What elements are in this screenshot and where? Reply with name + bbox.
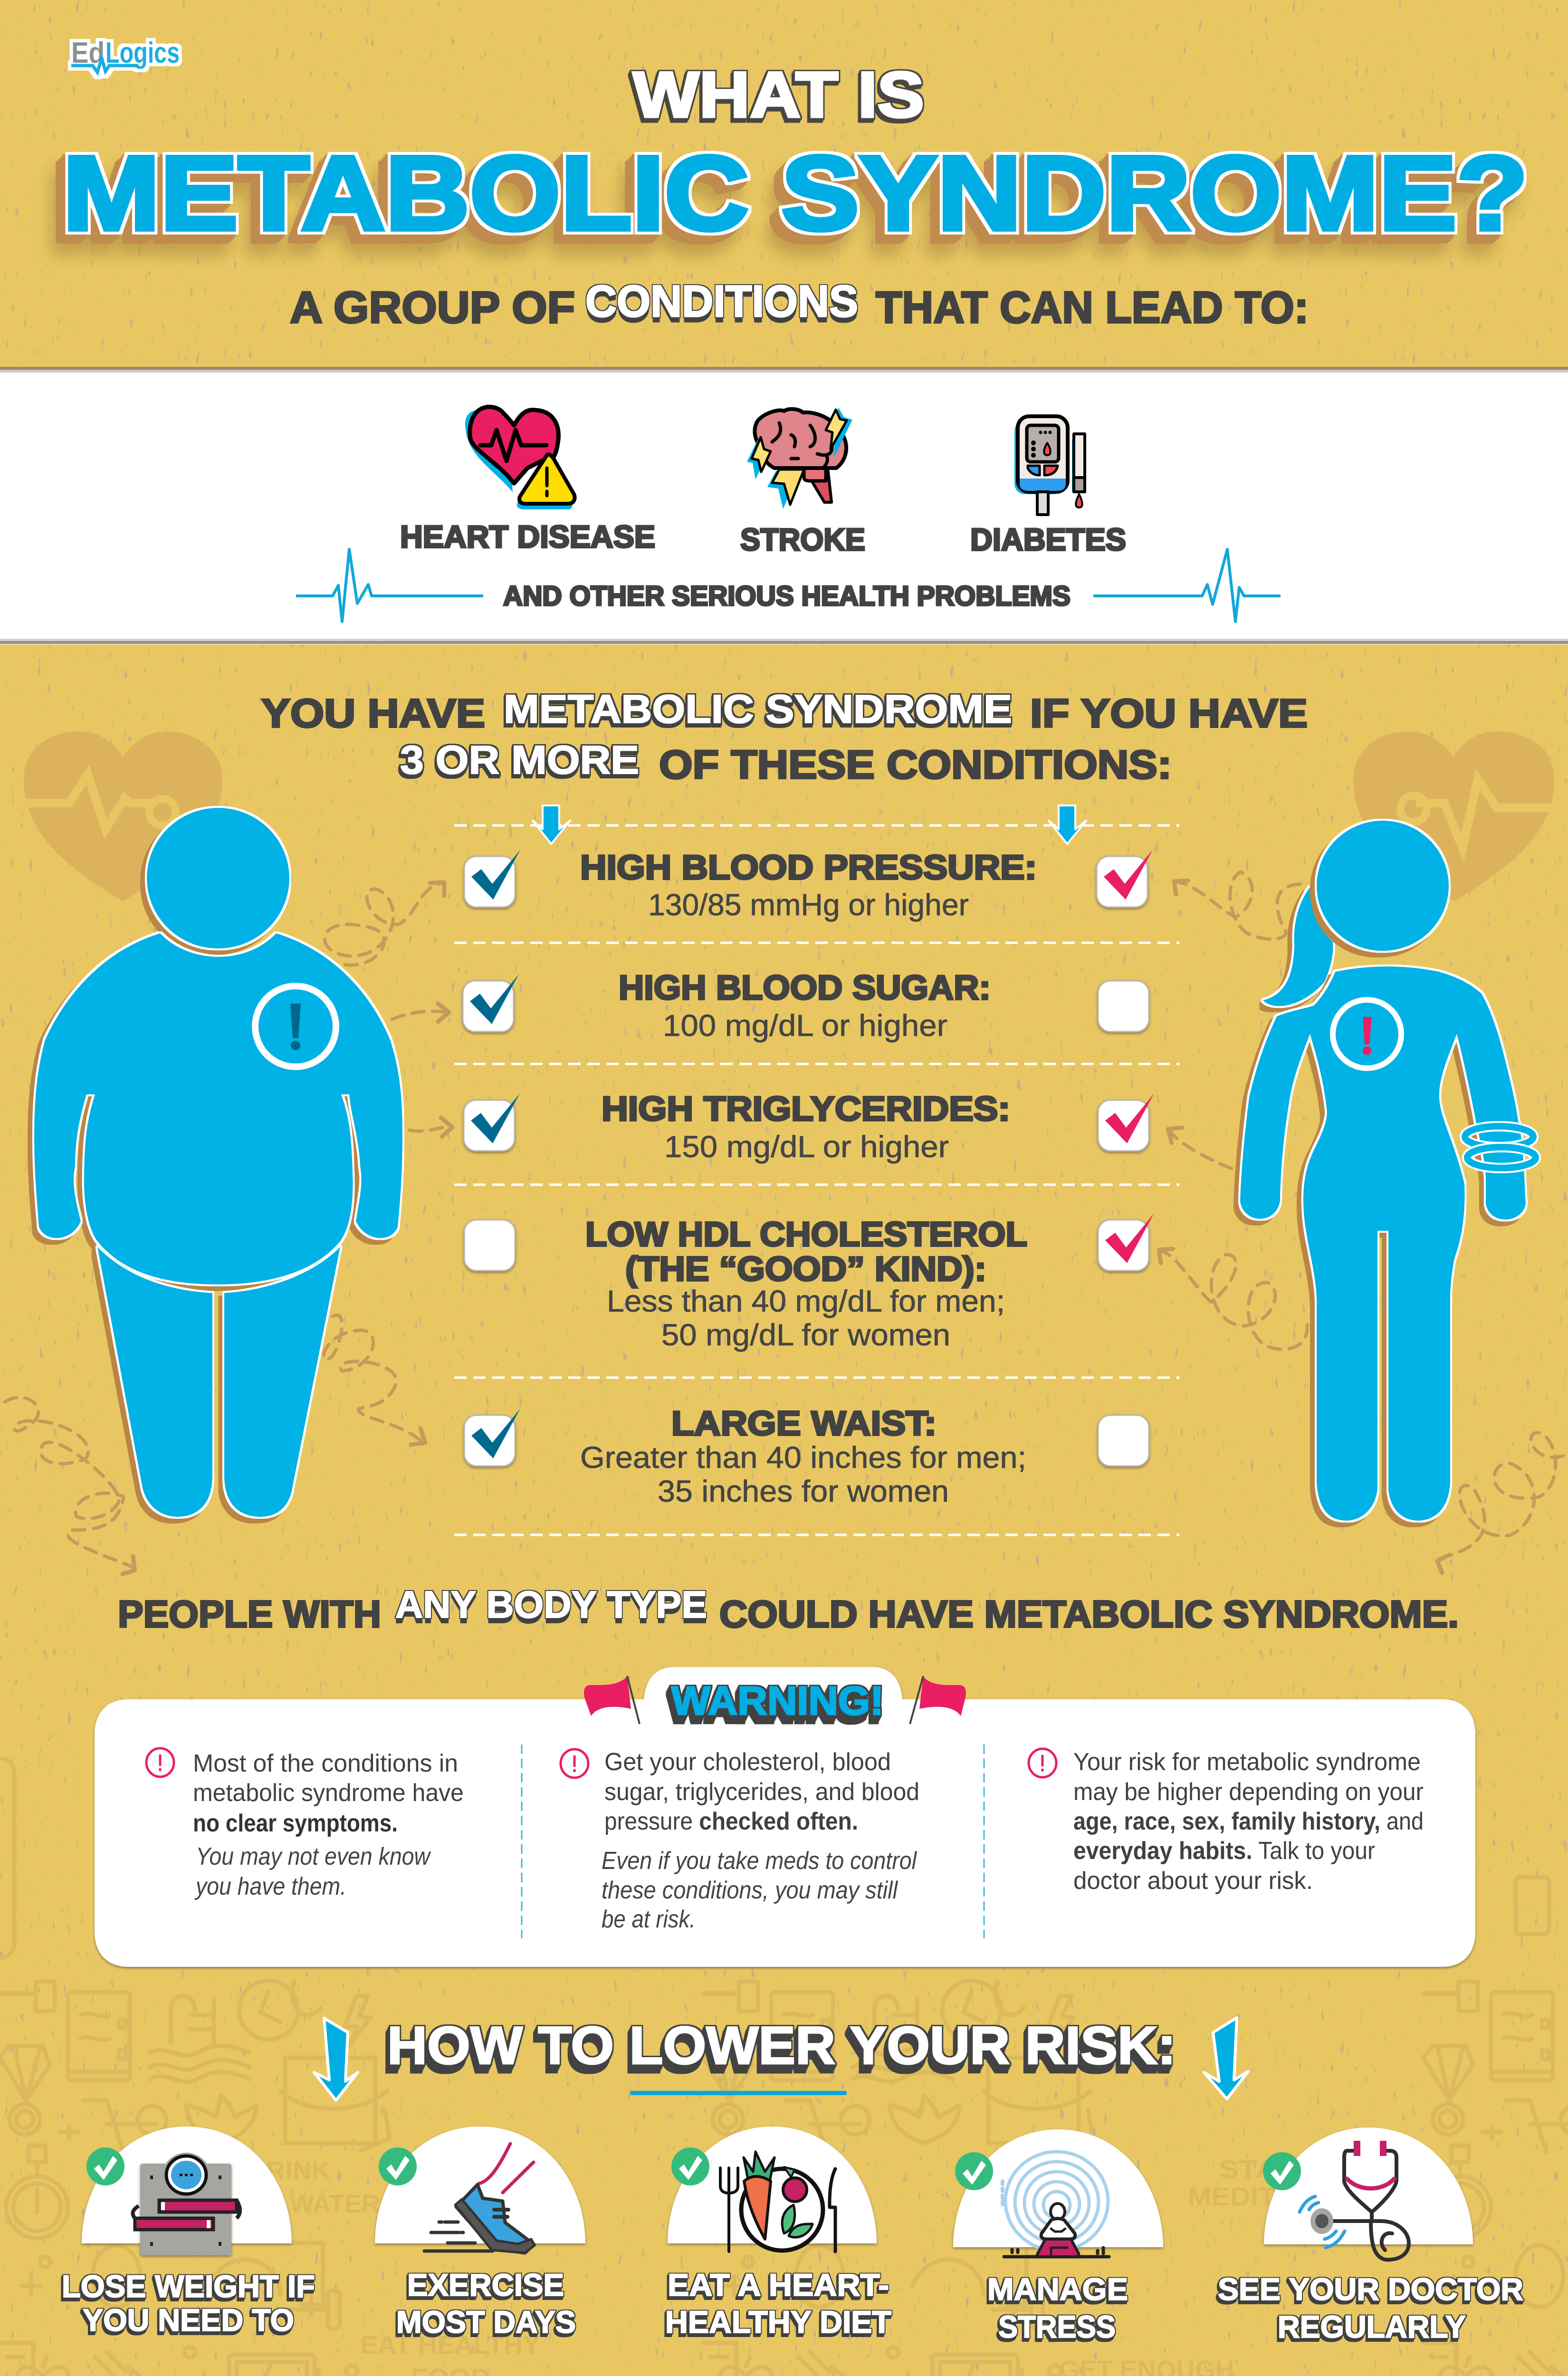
icon: heart with warning: [465, 407, 574, 509]
woman body: [1240, 967, 1526, 1521]
column 1: metabolic syndrome have: [193, 1779, 464, 1807]
man head: [147, 808, 289, 948]
column 2: Even if you take meds to control: [602, 1847, 917, 1875]
subtitle: THAT CAN LEAD TO:: [876, 282, 1309, 332]
icon: column arrow women: [1049, 805, 1086, 844]
checkbox men: [463, 974, 519, 1032]
figure: woman: [1240, 821, 1536, 1521]
heading: how to lower your risk: HOW TO LOWER YOUR RISK:: [387, 2016, 1176, 2075]
label: MOST DAYS: [396, 2304, 576, 2339]
step: stress: [953, 2129, 1163, 2344]
column 3: everyday habits. Talk to your: [1073, 1837, 1375, 1865]
heading: you have metabolic syndrome: METABOLIC SYNDROME: [504, 687, 1012, 731]
dashed walking paths: [5, 872, 1568, 1568]
column 1: Most of the conditions in: [193, 1750, 458, 1777]
label: diabetes: DIABETES: [970, 522, 1126, 557]
dome: [668, 2127, 877, 2243]
woman alert badge: [1331, 999, 1403, 1072]
icon: faded heart left: [24, 731, 222, 901]
checkbox women: [1098, 1213, 1154, 1271]
icon: meditation: [1003, 2152, 1109, 2257]
checkbox men: [464, 1093, 520, 1151]
label: [987, 2271, 1128, 2344]
background words: [247, 2155, 1359, 2376]
column 3: age, race, sex, family history, and: [1073, 1808, 1424, 1835]
icon: running shoe: [424, 2144, 535, 2253]
row: high blood sugar: 100 mg/dL or higher: [663, 1008, 947, 1043]
woman ponytail: [1263, 887, 1333, 1006]
step: doctor: [1218, 2127, 1523, 2344]
column 3: doctor about your risk.: [1073, 1867, 1313, 1895]
dome: [1264, 2127, 1473, 2244]
row: high blood sugar: [463, 969, 1149, 1043]
subtitle: CONDITIONS: [585, 276, 858, 326]
underline: [630, 2091, 847, 2095]
badge: [1263, 2152, 1301, 2190]
label: STRESS: [998, 2309, 1116, 2344]
subtitle: A GROUP OF: [290, 282, 575, 332]
row: large waist: Greater than 40 inches for men;: [580, 1440, 1026, 1475]
title line: metabolic syndrome: METABOLIC SYNDROME?: [63, 134, 1528, 252]
background words: MEDITATING: [1188, 2183, 1359, 2211]
label: stroke: STROKE: [740, 522, 865, 557]
row: large waist: LARGE WAIST:: [671, 1405, 937, 1443]
label: EXERCISE: [407, 2267, 564, 2302]
label: heart disease: HEART DISEASE: [400, 519, 655, 554]
flag right: [910, 1676, 966, 1724]
heading: you have metabolic syndrome: [261, 687, 1308, 787]
row: low hdl cholesterol: 50 mg/dL for women: [661, 1318, 950, 1352]
checkbox men: [464, 850, 520, 907]
step: diet: [665, 2127, 891, 2339]
row: large waist: 35 inches for women: [658, 1474, 949, 1508]
label: MANAGE: [987, 2271, 1128, 2307]
column 2: these conditions, you may still: [602, 1877, 898, 1904]
woman head: [1317, 821, 1449, 951]
man alert badge: [253, 985, 338, 1071]
label: [396, 2267, 576, 2339]
man torso and arms: [34, 933, 402, 1284]
background words: EAT HEALTHY: [360, 2331, 540, 2359]
row: high blood pressure: HIGH BLOOD PRESSURE:: [580, 849, 1037, 887]
column dividers: [522, 1744, 984, 1938]
row: high blood pressure: [464, 849, 1153, 922]
row: high blood pressure: 130/85 mmHg or higher: [648, 888, 969, 922]
step: lose weight: [62, 2127, 315, 2338]
background words: WATER: [290, 2190, 380, 2218]
column 3: Your risk for metabolic syndrome: [1073, 1748, 1421, 1776]
icon: scale and tape: [133, 2153, 240, 2255]
checklist dividers: [454, 825, 1179, 1535]
badge: [671, 2147, 709, 2185]
statement: any body type: COULD HAVE METABOLIC SYNDROME.: [719, 1593, 1459, 1635]
label: REGULARLY: [1278, 2309, 1466, 2344]
background words: DRINK: [247, 2156, 331, 2185]
checkbox women: [1098, 1093, 1154, 1151]
row: large waist: [464, 1405, 1149, 1508]
statement: any body type: PEOPLE WITH: [118, 1593, 381, 1635]
column 1: you have them.: [194, 1873, 346, 1900]
dashed path arrowheads: [123, 881, 1449, 1574]
pulse line right: [1093, 549, 1281, 622]
label: SEE YOUR DOCTOR: [1218, 2271, 1523, 2307]
logo: Ed: [71, 37, 105, 69]
column 3: [1029, 1748, 1424, 1895]
heading: you have metabolic syndrome: YOU HAVE: [261, 691, 485, 736]
row: low hdl cholesterol: LOW HDL CHOLESTEROL: [585, 1216, 1027, 1254]
heading: you have metabolic syndrome: 3 OR MORE: [400, 738, 639, 782]
woman bracelets: [1465, 1126, 1536, 1168]
background words: START: [1218, 2155, 1318, 2184]
subtitle: [290, 276, 1309, 332]
label: YOU NEED TO: [83, 2302, 294, 2338]
icon: column arrow men: [533, 805, 570, 844]
checkbox men: [464, 1220, 515, 1271]
step: exercise: [375, 2127, 585, 2339]
label: EAT A HEART-: [668, 2267, 889, 2302]
row: high triglycerides: 150 mg/dL or higher: [664, 1130, 949, 1164]
icon: glucose meter: [1014, 416, 1085, 515]
warning title: WARNING!: [671, 1678, 884, 1723]
statement: any body type: ANY BODY TYPE: [395, 1583, 707, 1626]
row: high triglycerides: [464, 1090, 1154, 1164]
figure: large man: [34, 808, 402, 1517]
logo: Logics: [105, 37, 180, 69]
man right leg: [224, 1247, 340, 1517]
icon: plate with food: [720, 2152, 835, 2251]
column 2: [561, 1748, 919, 1933]
label: [665, 2267, 891, 2339]
row: high blood sugar: HIGH BLOOD SUGAR:: [619, 969, 991, 1007]
background pattern: health icons: [0, 1758, 1568, 2376]
checkbox men: [464, 1408, 520, 1466]
column 2: pressure checked often.: [604, 1808, 858, 1835]
column 2: be at risk.: [602, 1906, 696, 1933]
column 1: [146, 1748, 464, 1900]
label: other health problems: AND OTHER SERIOUS HEALTH PROBLEMS: [503, 581, 1071, 612]
column 2: sugar, triglycerides, and blood: [604, 1778, 919, 1806]
icon: faded heart right: [1353, 731, 1554, 901]
column 3: may be higher depending on your: [1073, 1778, 1424, 1806]
heading: you have metabolic syndrome: OF THESE CONDITIONS:: [659, 742, 1172, 787]
logo: [71, 37, 180, 72]
icon: brain with lightning: [747, 408, 852, 509]
flag left: [584, 1676, 640, 1724]
badge: [955, 2152, 993, 2190]
badge: [86, 2147, 124, 2185]
icon: arrow left: [314, 2018, 358, 2100]
statement: any body type: [118, 1583, 1459, 1635]
icon: stethoscope: [1300, 2141, 1409, 2260]
label: [62, 2269, 315, 2338]
panel: white band of outcomes: [0, 367, 1568, 644]
column 1: no clear symptoms.: [193, 1810, 398, 1837]
panel: warning: [95, 1667, 1475, 1967]
checkbox women: [1098, 981, 1149, 1032]
dome: [953, 2129, 1163, 2247]
icon: arrow right: [1204, 2018, 1248, 2099]
row: high triglycerides: HIGH TRIGLYCERIDES:: [602, 1090, 1010, 1128]
dome: [375, 2127, 585, 2243]
checkbox women: [1098, 1415, 1149, 1466]
row: low hdl cholesterol: Less than 40 mg/dL for men;: [607, 1284, 1005, 1318]
column 2: Get your cholesterol, blood: [604, 1748, 891, 1776]
pulse line left: [296, 549, 483, 622]
label: [1218, 2271, 1523, 2344]
title: [63, 58, 1528, 252]
checkbox women: [1097, 850, 1153, 907]
label: HEALTHY DIET: [665, 2304, 891, 2339]
title line: what is: WHAT IS: [633, 58, 924, 131]
dome: [82, 2127, 292, 2243]
column 1: You may not even know: [196, 1843, 431, 1870]
man left leg: [97, 1247, 212, 1517]
label: LOSE WEIGHT IF: [62, 2269, 315, 2304]
heading: you have metabolic syndrome: IF YOU HAVE: [1030, 691, 1308, 736]
row: low hdl cholesterol: [464, 1213, 1154, 1352]
badge: [379, 2147, 417, 2185]
row: low hdl cholesterol: (THE “GOOD” KIND):: [625, 1250, 986, 1288]
